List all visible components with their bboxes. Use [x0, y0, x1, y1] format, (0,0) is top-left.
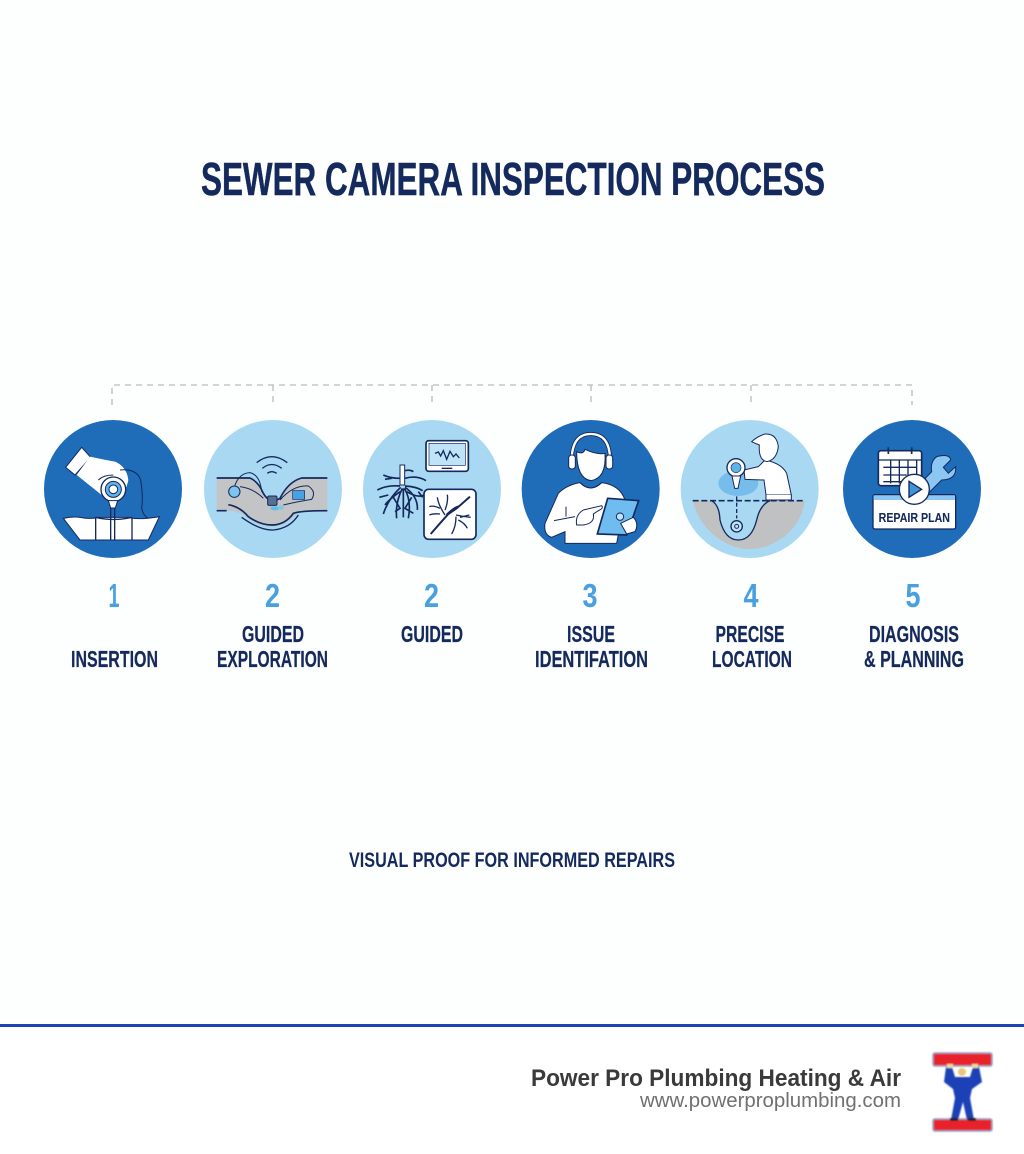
step 1 label	[71, 577, 158, 672]
icon: camera in pipe	[204, 420, 342, 558]
step 4 label: LOCATION	[712, 646, 792, 672]
logo: strongman lifting pipe	[933, 1053, 992, 1131]
step 2 label	[217, 577, 328, 672]
step 1 label: 1	[108, 577, 120, 614]
step 4 label	[712, 577, 792, 672]
website: www.powerproplumbing.com	[639, 1090, 901, 1112]
dashed connector bracket	[112, 385, 912, 405]
step 2 repeated label: 2	[424, 577, 439, 614]
step 2 label: GUIDED	[242, 621, 304, 647]
icon: repair plan	[843, 420, 981, 558]
icon: technician with tablet	[522, 420, 660, 558]
icon: hand inserting camera	[44, 420, 182, 558]
step 3 label	[535, 577, 648, 672]
step 2 label: EXPLORATION	[217, 646, 328, 672]
step 5 label: DIAGNOSIS	[869, 621, 959, 647]
footer	[0, 1024, 1024, 1154]
step 3 label: IDENTIFATION	[535, 646, 648, 672]
icon: roots, monitor and crack	[363, 420, 501, 558]
step 2 repeated label	[401, 577, 463, 647]
step 2 repeated label: GUIDED	[401, 621, 463, 647]
step 2 label: 2	[265, 577, 280, 614]
company name: Power Pro Plumbing Heating & Air	[531, 1065, 901, 1092]
step 1 label: INSERTION	[71, 646, 158, 672]
icon: locating the camera from above ground	[681, 420, 819, 558]
step 5 label: & PLANNING	[864, 646, 964, 672]
step 4 label: 4	[744, 577, 759, 614]
step 4 label: PRECISE	[716, 621, 784, 647]
step 5 label	[864, 577, 964, 672]
step 5 label: 5	[906, 577, 920, 614]
step 3 label: 3	[582, 577, 598, 614]
icon: repair plan: REPAIR PLAN	[879, 510, 950, 525]
step 3 label: ISSUE	[567, 621, 615, 647]
tagline: VISUAL PROOF FOR INFORMED REPAIRS	[349, 849, 675, 872]
